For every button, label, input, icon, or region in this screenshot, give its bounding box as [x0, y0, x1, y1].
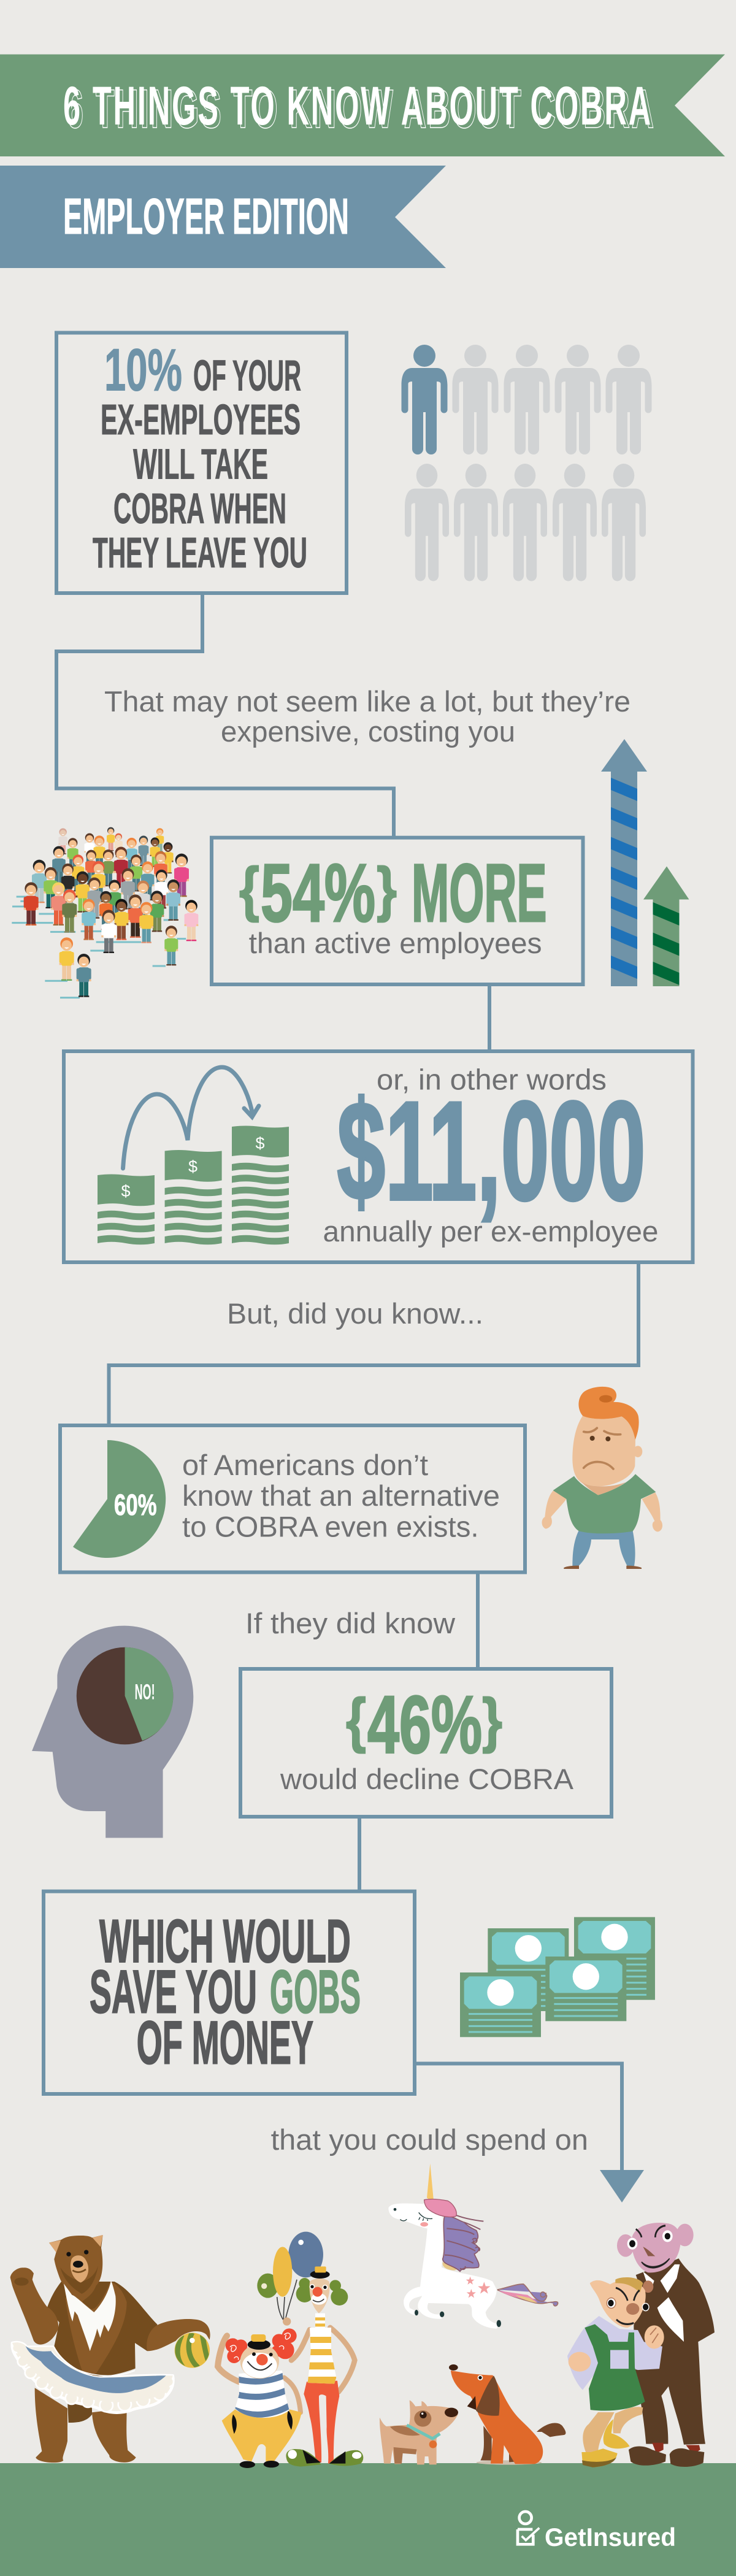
icon: dollar bills — [460, 1917, 655, 2037]
chart: 60 percent pie — [73, 1440, 166, 1558]
panel: 54 percent more: } — [377, 855, 397, 922]
panel: 60 percent of Americans: of Americans don’t — [182, 1449, 428, 1481]
subtitle banner: EMPLOYER EDITION — [63, 188, 349, 245]
text: that may not seem like a lot: That may not seem like a lot, but they’re — [104, 685, 631, 718]
text: if they did know: If they did know — [245, 1607, 456, 1639]
illustration: orange dog — [449, 2364, 565, 2465]
panel: 46 percent — [240, 1669, 611, 1817]
panel: 46 percent: would decline COBRA — [280, 1763, 574, 1795]
logo: GetInsured: GetInsured — [545, 2523, 676, 2551]
panel: 46 percent: 46% — [367, 1680, 482, 1771]
panel: 46 percent: { — [346, 1686, 366, 1754]
text: that may not seem like a lot: expensive, costing you — [221, 715, 515, 748]
panel: 54 percent more: MORE — [412, 848, 547, 939]
panel: 10 percent: WILL TAKE — [133, 440, 268, 488]
logo: GetInsured — [518, 2512, 676, 2551]
illustration: two clowns with balloons — [218, 2232, 363, 2468]
panel: 54 percent more — [212, 838, 583, 984]
balloons — [257, 2232, 323, 2323]
panel: 11000 dollars: annually per ex-employee — [323, 1215, 659, 1248]
panel: 10 percent: 10% — [104, 336, 182, 404]
panel: 10 percent: COBRA WHEN — [113, 485, 286, 532]
text: that may not seem like a lot — [104, 685, 631, 748]
icon: rising blue arrow — [601, 739, 647, 986]
illustration: two puppets — [567, 2223, 715, 2467]
icon: person with checkbox — [518, 2512, 539, 2544]
panel: 11000 dollars: or, in other words — [377, 1064, 607, 1096]
icon: sad man — [542, 1387, 662, 1569]
subtitle banner — [0, 166, 446, 268]
panel: save gobs of money: OF MONEY — [137, 2008, 313, 2077]
icon: head with pie chart — [32, 1626, 193, 1838]
panel: save gobs of money: GOBS — [270, 1958, 361, 2026]
illustration: unicorn — [388, 2163, 558, 2329]
illustration: bear in tutu — [10, 2235, 210, 2463]
arrow: down to spending ideas — [600, 2170, 644, 2202]
panel: save gobs of money: SAVE YOU — [90, 1958, 257, 2026]
panel: 54 percent more: { — [239, 855, 259, 922]
panel: 10 percent: THEY LEAVE YOU — [93, 529, 307, 577]
connector lines — [56, 595, 638, 2171]
title banner — [0, 55, 725, 156]
panel: 54 percent more: 54% — [261, 848, 375, 939]
icon: rising green arrow — [643, 866, 689, 986]
text: but did you know: But, did you know... — [227, 1297, 483, 1330]
panel: save gobs of money — [44, 1892, 415, 2094]
text: that you could spend on: that you could spend on — [271, 2123, 588, 2156]
panel: 11000 dollars — [64, 1051, 693, 1262]
chart: 60 percent pie: 60% — [114, 1489, 157, 1522]
icon: money stacks with jumping arrow: $ — [255, 1134, 265, 1152]
ground band — [0, 2463, 736, 2576]
tutu — [12, 2342, 174, 2413]
label: NO: NO! — [135, 1681, 155, 1704]
panel: save gobs of money: WHICH WOULD — [99, 1907, 351, 1975]
panel: 10 percent: OF YOUR — [193, 351, 301, 400]
illustration: small tan dog — [380, 2400, 458, 2464]
icon: money stacks with jumping arrow: $ — [121, 1182, 131, 1200]
icon: money stacks with jumping arrow — [98, 1067, 289, 1244]
panel: 46 percent: } — [482, 1686, 502, 1754]
panel: 60 percent of Americans — [60, 1425, 525, 1573]
panel: 10 percent: EX-EMPLOYEES — [101, 396, 301, 443]
icon: crowd of people — [12, 827, 198, 998]
panel: 54 percent more: than active employees — [249, 927, 542, 959]
panel: 10 percent — [56, 332, 347, 593]
people icons: one in ten — [401, 345, 651, 581]
icon: money stacks with jumping arrow: $ — [188, 1157, 197, 1176]
panel: 60 percent of Americans: to COBRA even exists. — [182, 1510, 479, 1543]
panel: 60 percent of Americans: know that an alternative — [182, 1479, 500, 1512]
